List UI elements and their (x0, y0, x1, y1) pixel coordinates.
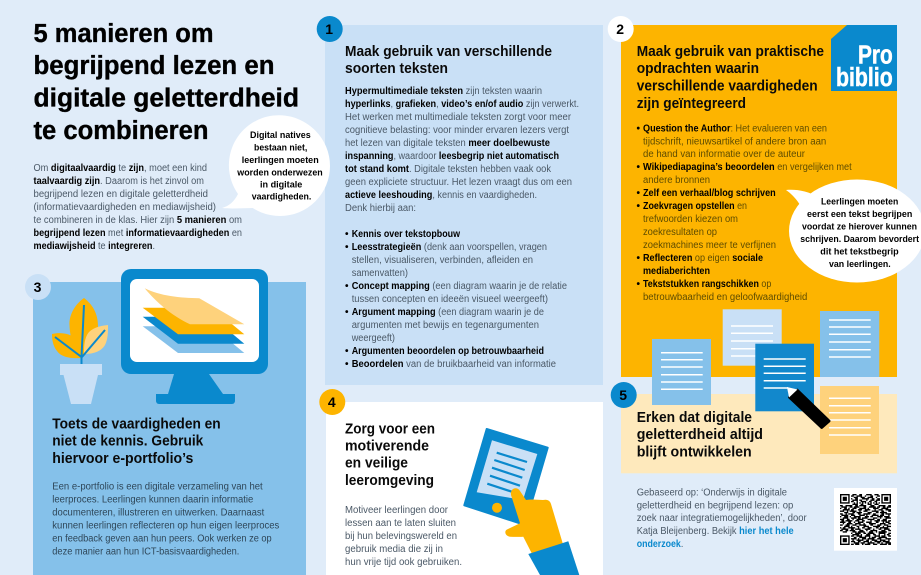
intro text: (informatievaardigheden en mediawijsheid) (34, 202, 216, 213)
bullet list panel 2: • (636, 188, 640, 199)
bullet list panel 1: stellen, visualiseren, verbinden, afleiden en (352, 255, 533, 266)
icon: monitor with layered sheets (121, 269, 268, 404)
logo: Probiblio (831, 25, 897, 92)
QR code (834, 488, 897, 551)
heading panel 1 (345, 43, 552, 77)
panel 3: e-portfolio (25, 269, 306, 575)
heading panel 5: geletterdheid altijd (637, 426, 763, 443)
number badge 5 (611, 382, 637, 408)
panel 5: ontwikkelen (611, 382, 897, 473)
heading panel 2: verschillende vaardigheden (637, 78, 818, 95)
number badge 5: 5 (619, 387, 627, 403)
callout: digital natives (222, 115, 330, 216)
heading panel 2: Maak gebruik van praktische (637, 43, 824, 60)
callout: leerlingen moeten: Leerlingen moeten (821, 196, 899, 206)
heading panel 5: Erken dat digitale (637, 409, 752, 426)
bullet list panel 1 (345, 229, 567, 370)
panel 1: teksten (317, 16, 603, 385)
source text: onderzoek. (637, 539, 683, 550)
title (34, 20, 299, 145)
body panel 1: cognitieve belasting: voor minder ervaren lezers vergt (345, 125, 569, 136)
bullet list panel 2: • (636, 279, 640, 290)
body panel 1: het lezen van digitale teksten meer doelbewuste (345, 138, 550, 149)
callout: leerlingen moeten (786, 180, 921, 282)
intro text: mediawijsheid te integreren. (34, 241, 155, 252)
intro text: taalvaardig zijn. Daarom is het zinvol om (34, 176, 204, 187)
panel 2: praktische opdrachten (608, 16, 897, 377)
body panel 3: kunnen leerlingen reflecteren op hun eigen leerproces (52, 520, 279, 531)
heading panel 1: soorten teksten (345, 60, 448, 77)
callout: digital natives: Digital natives (250, 130, 311, 140)
heading panel 4: leeromgeving (345, 472, 434, 489)
title: begrijpend lezen en (34, 52, 274, 80)
bullet list panel 2: • (636, 253, 640, 264)
callout: leerlingen moeten: eerst een tekst begrijpen (807, 209, 913, 219)
number badge 3 (25, 274, 51, 300)
bullet list panel 2: Zelf een verhaal/blog schrijven (643, 188, 776, 199)
body panel 3: Een e-portfolio is een digitale verzameling van het (52, 481, 263, 492)
heading panel 3: hiervoor e-portfolio’s (52, 450, 193, 467)
source text: geletterdheid en begrijpend lezen: op (637, 500, 794, 511)
bullet list panel 1: Concept mapping (een diagram waarin je de relatie (352, 281, 567, 292)
bullet list panel 2: tijdschrift, nieuwsartikel of andere bron aan (643, 136, 826, 147)
heading panel 4: motiverende (345, 437, 429, 454)
bullet list panel 2: Wikipediapagina’s beoordelen en vergelijken met (643, 162, 852, 173)
bullet list panel 1: Argument mapping (een diagram waarin je de (352, 307, 544, 318)
bullet list panel 1: argumenten met bewijs en tegenargumenten (352, 320, 539, 331)
bullet list panel 2: • (636, 201, 640, 212)
heading panel 4 (345, 420, 435, 489)
heading panel 2: zijn geïntegreerd (637, 95, 746, 112)
body panel 4: bij hun belevingswereld en (345, 531, 457, 542)
body panel 4: gebruik media die zij in (345, 544, 443, 555)
body panel 3 (52, 481, 279, 557)
source text: zoek naar integratiemogelijkheden’, door (637, 513, 807, 524)
bullet list panel 1: • (345, 307, 349, 318)
callout: digital natives: vaardigheden. (252, 192, 311, 202)
bullet list panel 1: Argumenten beoordelen op betrouwbaarheid (352, 346, 544, 357)
logo: Probiblio: biblio (836, 64, 893, 92)
bullet list panel 2: Question the Author: Het evalueren van een (643, 123, 827, 134)
body panel 3: leerproces. Leerlingen kunnen daarin informatie (52, 494, 254, 505)
number badge 2 (608, 16, 634, 42)
heading panel 5 (637, 409, 763, 461)
body panel 3: documenteren, illustreren en uitwerken. Daarnaast (52, 507, 265, 518)
number badge 4 (319, 389, 345, 415)
source text (637, 487, 807, 550)
bullet list panel 1: weergeeft) (351, 333, 395, 344)
title: 5 manieren om (34, 20, 214, 48)
heading panel 3: niet de kennis. Gebruik (52, 433, 204, 450)
bullet list panel 2: mediaberichten (643, 266, 710, 277)
heading panel 4: Zorg voor een (345, 420, 435, 437)
body panel 1: hyperlinks, grafieken, video’s en/of audio zijn verwerkt. (345, 99, 579, 110)
body panel 1: geen expliciete structuur. Het lezen vraagt dus om een (345, 177, 572, 188)
body panel 4 (345, 505, 462, 568)
body panel 1: actieve leeshouding, kennis en vaardigheden. (345, 190, 537, 201)
bullet list panel 1: Leesstrategieën (denk aan voorspellen, vragen (352, 242, 547, 253)
icon: tablet with hand (464, 429, 579, 575)
bullet list panel 1: • (345, 229, 349, 240)
body panel 4: lessen aan te laten sluiten (345, 518, 456, 529)
number badge 4: 4 (328, 394, 336, 410)
icon: document sheets with pen (652, 309, 879, 454)
body panel 1: Het werken met multimediale teksten zorgt voor meer (345, 112, 572, 123)
bullet list panel 2: de hand van informatie over de auteur (643, 149, 806, 160)
bullet list panel 2: trefwoorden kiezen om (643, 214, 738, 225)
intro text: begrijpend lezen en digitale geletterdheid (34, 189, 208, 200)
bullet list panel 1: samenvatten) (352, 268, 408, 279)
bullet list panel 2 (636, 123, 852, 303)
heading panel 1: Maak gebruik van verschillende (345, 43, 552, 60)
callout: digital natives: in digitale (260, 180, 302, 190)
logo: Probiblio: Pro (858, 41, 893, 69)
bullet list panel 2: zoekresultaten op (643, 227, 717, 238)
intro text: Om digitaalvaardig te zijn, moet een kind (34, 163, 207, 174)
number badge 2: 2 (616, 21, 624, 37)
bullet list panel 1: • (345, 281, 349, 292)
panel 4: leeromgeving (319, 389, 603, 575)
bullet list panel 2: Reflecteren op eigen sociale (643, 253, 763, 264)
body panel 1 (345, 86, 579, 214)
intro text (34, 163, 242, 252)
callout: leerlingen moeten: dit het tekstbegrip (820, 246, 899, 256)
heading panel 5: blijft ontwikkelen (637, 444, 752, 461)
bullet list panel 1: Kennis over tekstopbouw (352, 229, 460, 240)
number badge 3: 3 (34, 279, 42, 295)
callout: digital natives: bestaan niet, (254, 142, 307, 152)
heading panel 3: Toets de vaardigheden en (52, 415, 221, 432)
bullet list panel 2: andere bronnen (643, 175, 710, 186)
body panel 1: tot stand komt. Digitale teksten hebben vaak ook (345, 164, 552, 175)
bullet list panel 1: Beoordelen van de bruikbaarheid van informatie (352, 359, 556, 370)
icon: plant (52, 298, 108, 404)
callout: leerlingen moeten: voordat ze hierover kunnen (802, 222, 917, 232)
heading panel 2 (637, 43, 824, 112)
source text: Katja Bleijenberg. Bekijk hier het hele (637, 526, 794, 537)
bullet list panel 1: • (345, 359, 349, 370)
bullet list panel 1: • (345, 242, 349, 253)
bullet list panel 2: Tekststukken rangschikken op (643, 279, 772, 290)
number badge 1 (317, 16, 343, 42)
bullet list panel 2: betrouwbaarheid en geloofwaardigheid (643, 292, 807, 303)
bullet list panel 2: • (636, 162, 640, 173)
body panel 4: hun vrije tijd ook gebruiken. (345, 557, 462, 568)
bullet list panel 2: Zoekvragen opstellen en (643, 201, 747, 212)
body panel 3: en feedback geven aan hun peers. Ook werken ze op (52, 533, 272, 544)
bullet list panel 1: tussen concepten en ideeën visueel weergeeft) (352, 294, 548, 305)
body panel 1: Hypermultimediale teksten zijn teksten waarin (345, 86, 542, 97)
intro text: begrijpend lezen met informatievaardigheden en (34, 228, 242, 239)
body panel 1: inspanning, waardoor leesbegrip niet automatisch (345, 151, 559, 162)
bullet list panel 2: zoekmachines meer te verfijnen (643, 240, 776, 251)
bullet list panel 1: • (345, 346, 349, 357)
body panel 3: deze manier aan hun ICT-basisvaardigheden. (52, 546, 239, 557)
heading panel 2: opdrachten waarin (637, 60, 759, 77)
title: te combineren (34, 117, 208, 145)
bullet list panel 2: • (636, 123, 640, 134)
heading panel 3 (52, 415, 221, 467)
callout: digital natives: worden onderwezen (236, 168, 323, 178)
heading panel 4: en veilige (345, 455, 408, 472)
source text: Gebaseerd op: ‘Onderwijs in digitale (637, 487, 787, 498)
callout: digital natives: leerlingen moeten (242, 155, 319, 165)
body panel 4: Motiveer leerlingen door (345, 505, 449, 516)
number badge 1: 1 (325, 21, 333, 37)
callout: leerlingen moeten: van leerlingen. (829, 259, 891, 269)
body panel 1: Denk hierbij aan: (345, 203, 416, 214)
title: digitale geletterdheid (34, 84, 299, 112)
intro text: te combineren in de klas. Hier zijn 5 manieren om (34, 215, 242, 226)
